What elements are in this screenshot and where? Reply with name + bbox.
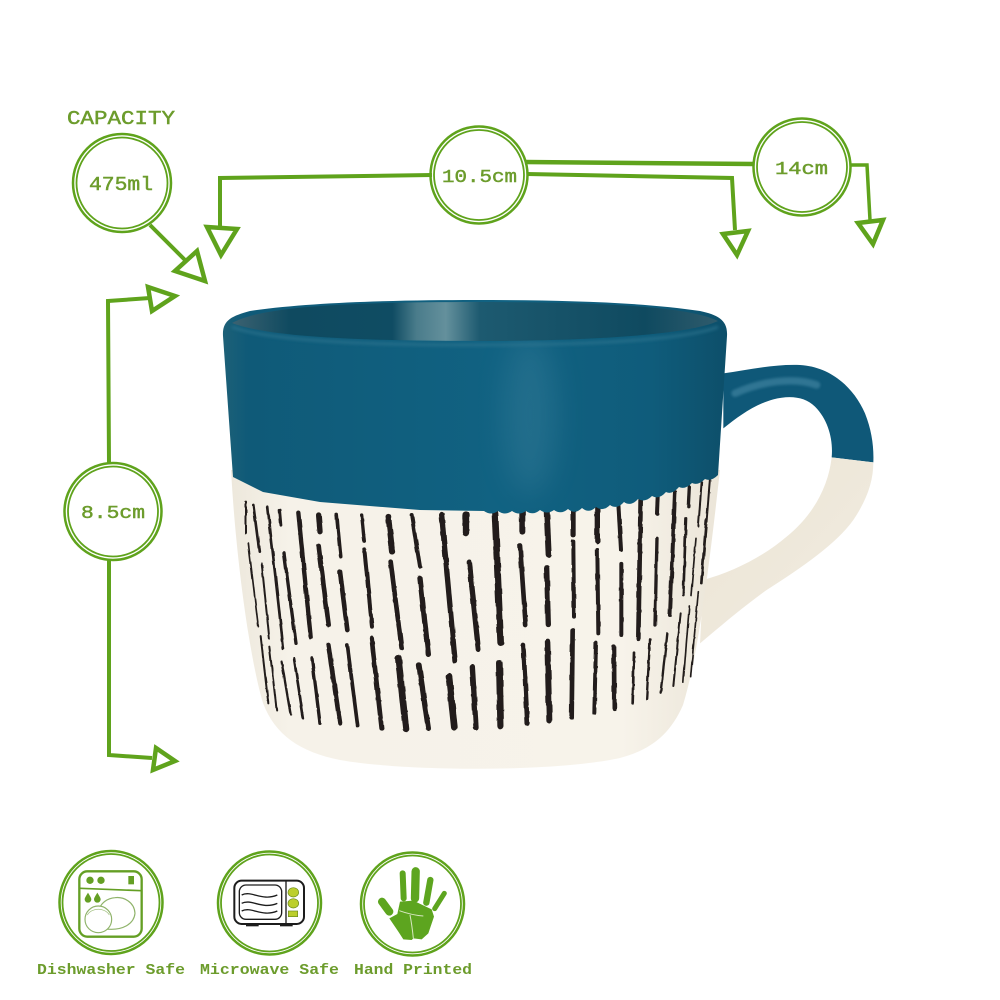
10.5cm value: 10.5cm bbox=[442, 168, 517, 188]
mug black dash pattern bbox=[246, 478, 710, 729]
dishwasher circle bbox=[60, 851, 162, 954]
height dimension bbox=[64, 287, 175, 770]
microwave label: Microwave Safe bbox=[200, 962, 339, 979]
height top arrow bbox=[108, 287, 175, 463]
mug cream base bbox=[231, 470, 720, 769]
14cm circle bbox=[754, 118, 850, 216]
capacity value: 475ml bbox=[89, 174, 153, 196]
8.5cm value: 8.5cm bbox=[81, 504, 145, 524]
capacity callout bbox=[73, 134, 205, 281]
icon: dishwasher bbox=[79, 871, 142, 937]
14cm right arrow bbox=[851, 165, 883, 244]
total width dimension bbox=[525, 118, 883, 244]
hand circle bbox=[361, 852, 464, 956]
hand printed badge bbox=[354, 852, 472, 979]
10.5cm right arrow bbox=[527, 174, 748, 255]
mug inner opening bbox=[232, 302, 718, 341]
rim highlight bbox=[232, 327, 718, 345]
hand printed label: Hand Printed bbox=[354, 962, 472, 979]
microwave circle bbox=[218, 852, 321, 954]
14cm value: 14cm bbox=[775, 160, 828, 180]
mug blue glaze body bbox=[223, 300, 727, 514]
microwave safe badge bbox=[200, 852, 339, 979]
mug handle bbox=[700, 365, 873, 643]
icon: hand print bbox=[382, 871, 444, 940]
8.5cm circle bbox=[64, 463, 162, 560]
capacity circle bbox=[73, 134, 171, 232]
bottom width dimension bbox=[207, 126, 748, 255]
dishwasher label: Dishwasher Safe bbox=[37, 962, 185, 979]
glaze highlight bbox=[504, 335, 556, 495]
capacity arrow bbox=[150, 225, 205, 281]
height bottom arrow bbox=[109, 560, 175, 770]
10.5cm circle bbox=[430, 126, 528, 224]
capacity heading: CAPACITY bbox=[67, 108, 176, 130]
10.5cm left arrow bbox=[207, 175, 432, 255]
icon: microwave bbox=[234, 881, 304, 926]
mug bbox=[223, 300, 873, 769]
dishwasher safe badge bbox=[37, 851, 185, 979]
14cm left line bbox=[525, 162, 754, 164]
